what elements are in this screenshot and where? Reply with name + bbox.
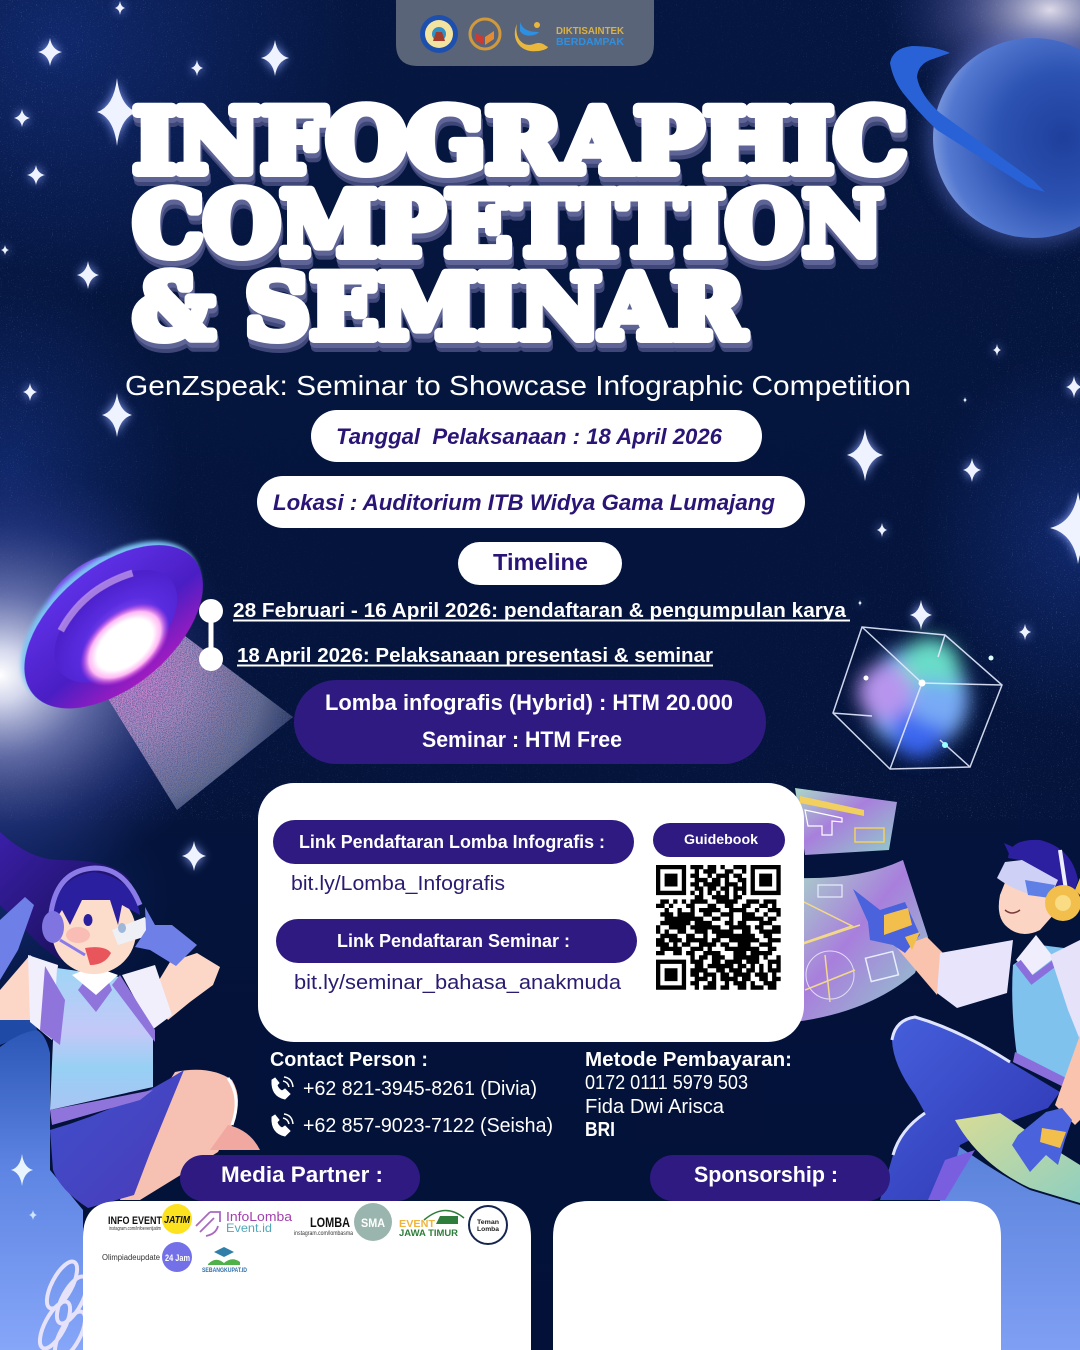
right hill xyxy=(940,1145,1080,1350)
logo: Olimpiade Update 24 Jam: 24 Jam xyxy=(165,1253,190,1263)
boy: arm and sleeve xyxy=(897,937,1013,1008)
logo: Olimpiade Update 24 Jam: Olimpiadeupdate xyxy=(102,1253,161,1262)
logo: Info Event Jatim: instagram.com/infoeventjatim xyxy=(109,1226,161,1232)
price pill: Seminar : HTM Free xyxy=(422,727,622,752)
illustration: left hill xyxy=(0,990,83,1350)
girl: legs xyxy=(120,1070,260,1200)
logo: Lomba SMA: LOMBA xyxy=(310,1214,350,1230)
sponsorship pill: Sponsorship : xyxy=(694,1162,838,1187)
illustration: girl with headset xyxy=(0,832,260,1208)
boy: tablet xyxy=(955,1113,1080,1203)
stars xyxy=(1,1,1080,871)
logo: Info Event Jatim: JATIM xyxy=(164,1215,191,1226)
panel: media partners xyxy=(83,1201,531,1350)
sponsorship pill xyxy=(650,1155,890,1201)
logo: Sebangkupat.id: SEBANGKUPAT.ID xyxy=(202,1267,247,1274)
logo: Info Event Jatim xyxy=(108,1204,192,1234)
logo: Lomba SMA xyxy=(294,1203,392,1241)
boy: torso xyxy=(1012,935,1080,1095)
logo: Teman Lomba xyxy=(469,1206,507,1244)
location pill xyxy=(257,476,805,528)
boy: lower arm and hand xyxy=(1012,1035,1080,1172)
payment method: BRI xyxy=(585,1119,615,1141)
illustration: boy with VR headset xyxy=(853,840,1080,1203)
logo: Diktisaintek Berdampak: BERDAMPAK xyxy=(556,36,624,48)
title xyxy=(133,89,907,359)
location pill: Lokasi : Auditorium ITB Widya Gama Lumajang xyxy=(273,490,776,515)
title: COMPETITION xyxy=(133,172,883,276)
illustration: small floating panel xyxy=(795,788,897,855)
logo: Diktisaintek Berdampak xyxy=(515,22,624,51)
girl: head xyxy=(42,868,150,974)
logo: Lomba SMA: instagram.com/lombasma xyxy=(294,1231,354,1237)
link button: lomba: Link Pendaftaran Lomba Infografis : xyxy=(299,832,605,852)
QR code xyxy=(656,867,781,988)
girl: gloves xyxy=(0,897,197,980)
price pill: Lomba infografis (Hybrid) : HTM 20.000 xyxy=(325,690,733,715)
illustration: large floating panel xyxy=(795,860,928,1022)
contact person heading: Contact Person : xyxy=(270,1049,428,1071)
registration card xyxy=(258,783,804,1042)
icon: phone 2 xyxy=(272,1114,293,1136)
logo: Teman Lomba: Teman xyxy=(477,1220,499,1226)
timeline entry 1: 28 Februari - 16 April 2026: pendaftaran & pengumpulan karya xyxy=(233,600,847,622)
contact number 1: +62 821-3945-8261 (Divia) xyxy=(303,1078,537,1100)
guidebook button xyxy=(653,823,785,857)
media partner pill xyxy=(180,1155,420,1201)
payment method: 0172 0111 5979 503 xyxy=(585,1072,748,1094)
panel: sponsorship xyxy=(553,1201,1001,1350)
price pill xyxy=(294,680,766,764)
timeline heading pill xyxy=(458,542,622,585)
link text: seminar: bit.ly/seminar_bahasa_anakmuda xyxy=(294,972,622,994)
payment method: Metode Pembayaran: xyxy=(585,1049,792,1071)
subtitle: GenZspeak: Seminar to Showcase Infographic Competition xyxy=(125,370,911,401)
logo: Info Event Jatim: INFO EVENT xyxy=(108,1215,162,1227)
girl: vest xyxy=(40,966,155,1125)
link button: seminar xyxy=(276,919,637,963)
logo: Teman Lomba: Lomba xyxy=(477,1227,500,1233)
payment method xyxy=(585,1049,792,1141)
logo: Event Jawa Timur: JAWA TIMUR xyxy=(399,1228,459,1238)
logo: university crest xyxy=(420,15,458,53)
logo: InfoLomba Event.id: Event.id xyxy=(226,1221,272,1235)
logo: Lomba SMA: SMA xyxy=(361,1216,385,1230)
girl: sleeves xyxy=(28,955,172,1040)
boy: head xyxy=(997,840,1080,934)
title: INFOGRAPHIC xyxy=(133,89,907,193)
logo: Diktisaintek Berdampak: DIKTISAINTEK xyxy=(556,25,624,37)
link button: lomba xyxy=(273,820,634,864)
girl: arms xyxy=(0,953,220,1020)
timeline heading pill: Timeline xyxy=(493,549,588,575)
logo: Event Jawa Timur: EVENT xyxy=(399,1219,435,1230)
planet with ring xyxy=(890,32,1080,244)
timeline dots and connector xyxy=(199,599,223,671)
logo: Olimpiade Update 24 Jam xyxy=(102,1242,192,1272)
logo: Event Jawa Timur xyxy=(399,1210,464,1238)
logo: InfoLomba Event.id xyxy=(196,1209,293,1236)
girl: skirt xyxy=(50,1070,184,1208)
date pill xyxy=(311,410,762,462)
payment method: Fida Dwi Arisca xyxy=(585,1096,725,1118)
logo: InfoLomba Event.id: InfoLomba xyxy=(226,1209,293,1224)
date pill: Tanggal Pelaksanaan : 18 April 2026 xyxy=(336,424,723,449)
illustration: ring coils xyxy=(34,1257,93,1350)
timeline entry 2: 18 April 2026: Pelaksanaan presentasi & seminar xyxy=(237,645,713,667)
girl: flowing hair xyxy=(0,832,130,960)
background: night sky xyxy=(0,0,1080,990)
boy: bent leg and lower leg xyxy=(880,1017,1060,1200)
guidebook button: Guidebook xyxy=(684,831,758,847)
UFO light beam xyxy=(107,630,293,810)
logo plate xyxy=(396,0,654,66)
logo: Sebangkupat.id xyxy=(202,1247,247,1274)
title: & SEMINAR xyxy=(133,255,746,359)
link button: seminar: Link Pendaftaran Seminar : xyxy=(337,931,570,951)
icon: phone 1 xyxy=(272,1077,293,1099)
media partner pill: Media Partner : xyxy=(221,1162,383,1187)
link text: lomba: bit.ly/Lomba_Infografis xyxy=(291,873,505,895)
contact number 2: +62 857-9023-7122 (Seisha) xyxy=(303,1115,553,1137)
boy: pointing glove xyxy=(853,889,920,953)
UFO xyxy=(0,506,233,740)
wireframe cube with glowing orb xyxy=(833,627,1002,769)
logo: circle book xyxy=(470,19,500,49)
